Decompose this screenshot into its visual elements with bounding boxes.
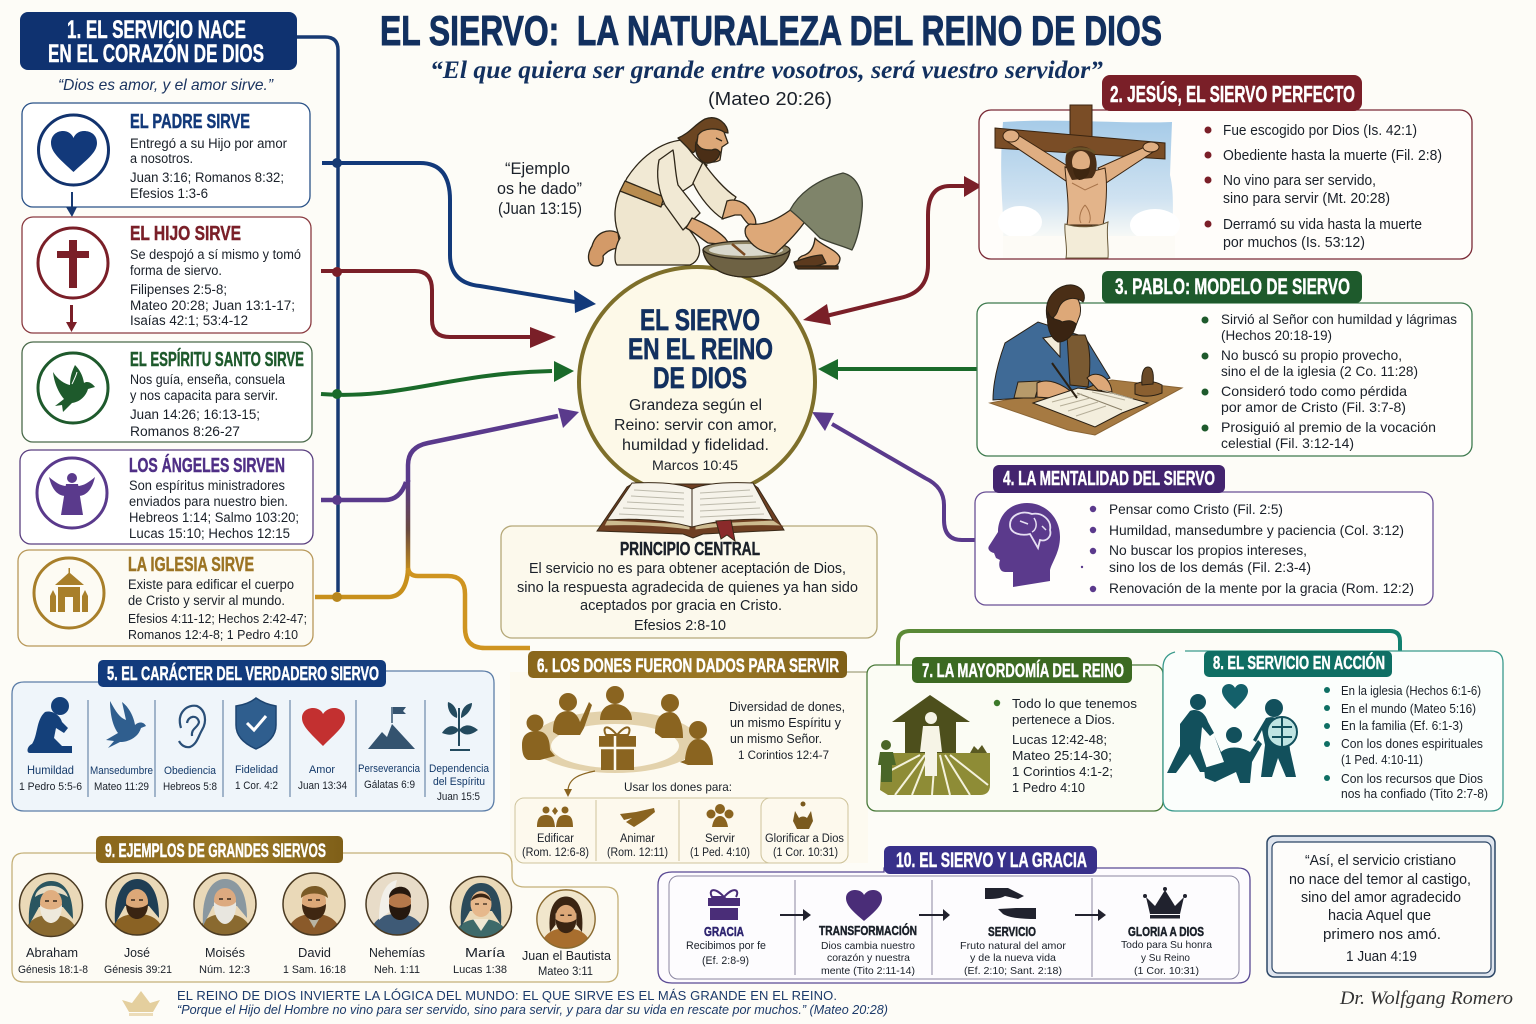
- card: el espiritu santo sirve: [22, 342, 312, 442]
- names: Mateo 3:11: [538, 966, 593, 978]
- panel 6 dones: 6. LOS DONES FUERON DADOS PARA SERVIR: [537, 656, 839, 677]
- names: 1 Sam. 16:18: [283, 964, 346, 976]
- connector: section 7 to section 8: [898, 631, 1400, 665]
- labels: [19, 763, 490, 803]
- connectors from section 1 to centre: [297, 37, 978, 648]
- portrait: juan el bautista: [537, 890, 595, 949]
- panel 6 dones: Usar los dones para:: [624, 780, 732, 794]
- card: el espiritu santo sirve: Nos guía, enseña, consuela: [130, 372, 285, 387]
- panel 10 gracia: Dios cambia nuestro: [821, 940, 915, 952]
- panel 1 header: [20, 12, 297, 70]
- panel 2 jesus: [979, 75, 1472, 259]
- bullets list: En la familia (Ef. 6:1-3): [1341, 719, 1463, 733]
- names: Génesis 39:21: [104, 964, 172, 976]
- card: la iglesia sirve: [18, 550, 313, 646]
- portrait: abraham: [19, 873, 83, 937]
- central circle: humildad y fidelidad.: [622, 437, 769, 454]
- card: la iglesia sirve: de Cristo y servir al mundo.: [128, 593, 285, 608]
- panel 10 gracia: mente (Tito 2:11-14): [821, 965, 915, 977]
- icon: glorificar: [793, 802, 813, 829]
- illustration: paul writing: [990, 285, 1182, 435]
- footer line: EL REINO DE DIOS INVIERTE LA LÓGICA DEL MUNDO: EL QUE SIRVE ES EL MÁS GRANDE EN EL REINO.: [177, 988, 837, 1003]
- bullets list: (Hechos 20:18-19): [1221, 327, 1332, 343]
- subtitle reference: (Mateo 20:26): [708, 89, 832, 109]
- card: principio central: [501, 526, 877, 638]
- card: la iglesia sirve: Romanos 12:4-8; 1 Pedro 4:10: [128, 627, 298, 642]
- text: ejemplo os he dado: “Ejemplo: [505, 160, 570, 178]
- text: ejemplo os he dado: os he dado”: [497, 180, 582, 198]
- bullets list: Humildad, mansedumbre y paciencia (Col. 3:12): [1109, 522, 1404, 538]
- labels: 1 Cor. 4:2: [235, 780, 278, 792]
- icon: shield: [236, 698, 276, 749]
- bullets list: Con los dones espirituales: [1341, 737, 1483, 751]
- central circle: EN EL REINO: [628, 333, 773, 366]
- card: el hijo sirve: Mateo 20:28; Juan 13:1-17;: [130, 298, 295, 313]
- panel 10 gracia: y Su Reino: [1141, 952, 1190, 964]
- card: la iglesia sirve: Existe para edificar el cuerpo: [128, 577, 294, 592]
- card: el hijo sirve: [22, 217, 311, 333]
- panel 3 pablo: [977, 271, 1472, 456]
- uses of gifts: Animar: [620, 833, 655, 845]
- names: Génesis 18:1-8: [18, 964, 88, 976]
- bullets list: No buscó su propio provecho,: [1221, 347, 1402, 363]
- icon: dove: [38, 353, 108, 423]
- labels: Perseverancia: [358, 763, 421, 775]
- callout: quote box: no nace del temor al castigo,: [1289, 872, 1471, 888]
- icon: footer crown: [122, 991, 160, 1016]
- icon: heart: [38, 115, 108, 185]
- labels: Obediencia: [164, 765, 217, 777]
- card: el padre sirve: EL PADRE SIRVE: [130, 111, 250, 133]
- uses of gifts: Edificar: [537, 833, 574, 845]
- card: el padre sirve: a nosotros.: [130, 151, 193, 166]
- card: el espiritu santo sirve: Romanos 8:26-27: [130, 424, 240, 439]
- bullets list: Fue escogido por Dios (Is. 42:1): [1223, 123, 1417, 139]
- uses of gifts: (Rom. 12:6-8): [522, 847, 589, 859]
- text: diversidad de dones: Diversidad de dones,: [729, 700, 845, 714]
- central circle: EL SIERVO: [640, 304, 760, 337]
- callout: quote box: [1267, 836, 1495, 977]
- illustration: crucifix: [995, 105, 1180, 258]
- panel 10 gracia: (Ef. 2:8-9): [702, 955, 749, 967]
- panel 10 gracia: Recibimos por fe: [686, 940, 766, 952]
- icon: church: [34, 558, 104, 628]
- bullets list: En la iglesia (Hechos 6:1-6): [1341, 684, 1481, 698]
- bullets list: por amor de Cristo (Fil. 3:7-8): [1221, 399, 1406, 415]
- card: el hijo sirve: Filipenses 2:5-8;: [130, 282, 227, 297]
- panel 4 mentalidad: [975, 465, 1433, 605]
- bullets list: nos ha confiado (Tito 2:7-8): [1341, 787, 1488, 801]
- central circle: DE DIOS: [653, 362, 747, 395]
- subtitle quote: “El que quiera ser grande entre vosotros, será vuestro servidor”: [430, 57, 1104, 84]
- icon: servir: [706, 804, 734, 827]
- icon: heart: [846, 890, 882, 921]
- callout: quote box: “Así, el servicio cristiano: [1305, 853, 1456, 869]
- icon: plant: [442, 702, 478, 750]
- portrait: david: [283, 873, 345, 936]
- names: Nehemías: [369, 945, 425, 960]
- bullets list: No buscar los propios intereses,: [1109, 542, 1307, 558]
- card: principio central: sino la respuesta agradecida de quienes ya han sido: [517, 579, 858, 596]
- labels: Juan 13:34: [298, 780, 347, 792]
- text: ejemplo os he dado: (Juan 13:15): [498, 200, 582, 218]
- text: diversidad de dones: un mismo Señor.: [730, 732, 822, 746]
- bullets list: [1204, 123, 1442, 251]
- arrow: gift to uses: [564, 771, 595, 797]
- labels: Hebreos 5:8: [163, 781, 217, 793]
- labels: Mansedumbre: [90, 765, 153, 777]
- arrowheads: [530, 176, 982, 431]
- bullets list: sino los de los demás (Fil. 2:3-4): [1109, 559, 1311, 575]
- names: Neh. 1:11: [374, 964, 420, 976]
- panel 2 jesus: 2. JESÚS, EL SIERVO PERFECTO: [1110, 80, 1355, 107]
- arrows: [780, 909, 1106, 921]
- panel 8 servicio en accion: [1163, 651, 1503, 811]
- bullets list: por muchos (Is. 53:12): [1223, 235, 1365, 251]
- bullets list: Consideró todo como pérdida: [1221, 383, 1407, 399]
- portrait: nehemias: [366, 873, 428, 936]
- bullets list: Renovación de la mente por la gracia (Rom. 12:2): [1109, 580, 1414, 596]
- card: el espiritu santo sirve: Juan 14:26; 16:13-15;: [130, 407, 260, 422]
- icon: praying person: [28, 697, 72, 753]
- central circle: Grandeza según el: [629, 397, 762, 414]
- illustration: open bible: [597, 483, 784, 541]
- central circle: [579, 267, 815, 497]
- text: ejemplo os he dado: [497, 160, 582, 218]
- labels: 1 Pedro 5:5-6: [19, 781, 82, 793]
- panel 7 mayordomia: 7. LA MAYORDOMÍA DEL REINO: [922, 660, 1124, 682]
- card: los angeles sirven: enviados para nuestro bien.: [129, 494, 288, 509]
- card: los angeles sirven: [20, 450, 313, 544]
- names: Juan el Bautista: [522, 948, 612, 963]
- card: el padre sirve: Efesios 1:3-6: [130, 186, 208, 201]
- panel 7 mayordomia: pertenece a Dios.: [1012, 712, 1115, 727]
- panel 7 mayordomia: 1 Corintios 4:1-2;: [1012, 764, 1113, 779]
- panel 7 mayordomia: Lucas 12:42-48;: [1012, 732, 1107, 747]
- arrow: hijo down: [66, 305, 77, 332]
- icon: hands: [985, 888, 1036, 919]
- card: la iglesia sirve: Efesios 4:11-12; Hechos 2:42-47;: [128, 611, 307, 626]
- icon: angel: [37, 458, 107, 528]
- bullets list: [1202, 311, 1457, 451]
- card: el espiritu santo sirve: y nos capacita para servir.: [130, 388, 278, 403]
- illustration: helping people: [1167, 684, 1297, 783]
- bullets list: En el mundo (Mateo 5:16): [1341, 702, 1476, 716]
- card: la iglesia sirve: LA IGLESIA SIRVE: [128, 554, 254, 576]
- panel 10 gracia: GRACIA: [704, 924, 744, 939]
- panel 10 gracia: SERVICIO: [988, 924, 1036, 939]
- labels: Amor: [309, 764, 335, 776]
- card: el hijo sirve: EL HIJO SIRVE: [130, 223, 241, 245]
- bullets list: celestial (Fil. 3:12-14): [1221, 435, 1354, 451]
- labels: Humildad: [27, 763, 74, 777]
- footer quote: “Porque el Hijo del Hombre no vino para ser servido, sino para servir, y para dar su vida en rescate por muchos.” (Mateo 20:28): [177, 1003, 888, 1017]
- illustration: house and field: [878, 695, 990, 795]
- signature: Dr. Wolfgang Romero: [1339, 988, 1513, 1009]
- card: principio central: aceptados por gracia en Cristo.: [580, 597, 782, 614]
- panel 10 gracia: GLORIA A DIOS: [1128, 924, 1204, 939]
- bullets list: Derramó su vida hasta la muerte: [1223, 217, 1422, 233]
- names: David: [298, 945, 331, 960]
- card: principio central: El servicio no es para obtener aceptación de Dios,: [529, 560, 846, 577]
- bullets list: Prosiguió al premio de la vocación: [1221, 419, 1436, 435]
- panel 3 pablo: 3. PABLO: MODELO DE SIERVO: [1115, 274, 1350, 299]
- card: los angeles sirven: LOS ÁNGELES SIRVEN: [129, 454, 285, 477]
- card: los angeles sirven: Lucas 15:10; Hechos 12:15: [129, 526, 290, 541]
- uses of gifts: Servir: [705, 833, 735, 845]
- portrait: jose: [106, 873, 168, 936]
- panel 10 gracia: corazón y nuestra: [827, 952, 910, 964]
- icon: heart: [302, 708, 345, 746]
- panel 7 mayordomia: Mateo 25:14-30;: [1012, 748, 1112, 763]
- uses of gifts: (1 Ped. 4:10): [690, 847, 750, 859]
- text: diversidad de dones: [729, 700, 845, 762]
- names: María: [465, 945, 506, 960]
- bullets list: [1081, 501, 1414, 596]
- labels: del Espíritu: [433, 776, 485, 788]
- icon: edificar: [537, 806, 573, 827]
- panel 4 mentalidad: 4. LA MENTALIDAD DEL SIERVO: [1003, 468, 1215, 490]
- uses of gifts: (1 Cor. 10:31): [773, 847, 838, 859]
- bullets list: Obediente hasta la muerte (Fil. 2:8): [1223, 148, 1442, 164]
- card: el padre sirve: Juan 3:16; Romanos 8:32;: [130, 170, 284, 185]
- icon: crown: [1143, 887, 1187, 918]
- panel 1 header: EN EL CORAZÓN DE DIOS: [48, 38, 264, 68]
- card: los angeles sirven: Hebreos 1:14; Salmo 103:20;: [129, 510, 299, 525]
- panel 10 gracia: Todo para Su honra: [1121, 939, 1212, 951]
- labels: Mateo 11:29: [94, 781, 149, 793]
- panel 6 dones: [510, 651, 868, 863]
- callout: quote box: sino del amor agradecido: [1301, 890, 1461, 906]
- panel 1 quote: “Dios es amor, y el amor sirve.”: [58, 77, 274, 94]
- names: [18, 945, 612, 978]
- names: José: [124, 945, 150, 960]
- card: el espiritu santo sirve: EL ESPÍRITU SANTO SIRVE: [130, 348, 304, 371]
- icon: animar: [620, 808, 655, 827]
- uses of gifts: [515, 798, 848, 863]
- panel 10 gracia: (Ef. 2:10; Sant. 2:18): [964, 965, 1062, 977]
- panel 10 gracia: y de la nueva vida: [970, 952, 1056, 964]
- panel 7 mayordomia: Todo lo que tenemos: [1012, 696, 1138, 711]
- labels: Juan 15:5: [437, 791, 480, 803]
- illustration: jesus washing feet: [589, 118, 862, 277]
- central circle: Marcos 10:45: [652, 457, 738, 473]
- icon: ear: [179, 706, 205, 747]
- panel 10 gracia: TRANSFORMACIÓN: [819, 923, 917, 938]
- panel 7 mayordomia: 1 Pedro 4:10: [1012, 780, 1085, 795]
- arrow: padre to hijo: [66, 192, 77, 217]
- icon: dove: [106, 701, 146, 748]
- labels: Dependencia: [429, 763, 490, 775]
- uses of gifts: (Rom. 12:11): [607, 847, 668, 859]
- panel 8 servicio en accion: 8. EL SERVICIO EN ACCIÓN: [1213, 652, 1385, 673]
- panel 10 gracia: Fruto natural del amor: [960, 940, 1067, 952]
- labels: Fidelidad: [235, 764, 278, 776]
- card: el hijo sirve: Se despojó a sí mismo y tomó: [130, 247, 301, 262]
- card: el padre sirve: [22, 103, 310, 207]
- bullets list: Pensar como Cristo (Fil. 2:5): [1109, 501, 1283, 517]
- central circle: Reino: servir con amor,: [614, 417, 777, 434]
- names: Núm. 12:3: [199, 964, 250, 976]
- panel 10 gracia: (1 Cor. 10:31): [1134, 965, 1199, 977]
- bullets list: sino para servir (Mt. 20:28): [1223, 191, 1390, 207]
- panel 10 gracia: 10. EL SIERVO Y LA GRACIA: [896, 849, 1087, 872]
- card: principio central: PRINCIPIO CENTRAL: [620, 539, 760, 559]
- card: los angeles sirven: Son espíritus ministradores: [129, 478, 285, 493]
- text: diversidad de dones: un mismo Espíritu y: [730, 716, 842, 730]
- title: EL SIERVO: LA NATURALEZA DEL REINO DE DIOS: [380, 7, 1162, 54]
- bullets list: sino el de la iglesia (2 Co. 11:28): [1221, 363, 1418, 379]
- panel 9 ejemplos: 9. EJEMPLOS DE GRANDES SIERVOS: [105, 841, 326, 862]
- card: el hijo sirve: forma de siervo.: [130, 263, 222, 278]
- bullets list: Con los recursos que Dios: [1341, 772, 1483, 786]
- icon: mountain: [368, 707, 415, 749]
- portrait: maria: [450, 876, 512, 939]
- callout: quote box: 1 Juan 4:19: [1346, 949, 1417, 965]
- bullets list: (1 Ped. 4:10-11): [1341, 753, 1423, 767]
- uses of gifts: Glorificar a Dios: [765, 833, 844, 845]
- card: principio central: Efesios 2:8-10: [634, 617, 726, 634]
- panel 9 ejemplos: [12, 836, 618, 982]
- card: el hijo sirve: Isaías 42:1; 53:4-12: [130, 313, 248, 328]
- portrait: moises: [194, 873, 256, 936]
- bullets list: [1324, 684, 1488, 801]
- panel 1 header: 1. EL SERVICIO NACE: [67, 16, 246, 44]
- card: el padre sirve: Entregó a su Hijo por amor: [130, 136, 287, 151]
- icon: head with brain: [988, 503, 1060, 587]
- panel 5 caracter: 5. EL CARÁCTER DEL VERDADERO SIERVO: [107, 663, 379, 685]
- text: diversidad de dones: 1 Corintios 12:4-7: [738, 750, 829, 762]
- illustration: people and gift: [522, 686, 713, 773]
- bullets list: No vino para ser servido,: [1223, 173, 1376, 189]
- names: Abraham: [26, 945, 78, 960]
- bullets list: Sirvió al Señor con humildad y lágrimas: [1221, 311, 1457, 327]
- panel 10 gracia: [658, 846, 1250, 983]
- panel 7 mayordomia: [867, 657, 1163, 811]
- callout: quote box: primero nos amó.: [1323, 927, 1441, 943]
- names: Moisés: [205, 945, 245, 960]
- icon: gift: [708, 890, 740, 920]
- labels: Gálatas 6:9: [364, 779, 415, 791]
- icon: cross: [38, 228, 108, 298]
- panel 5 caracter: [12, 660, 494, 811]
- callout: quote box: hacia Aquel que: [1328, 908, 1431, 924]
- names: Lucas 1:38: [453, 964, 507, 976]
